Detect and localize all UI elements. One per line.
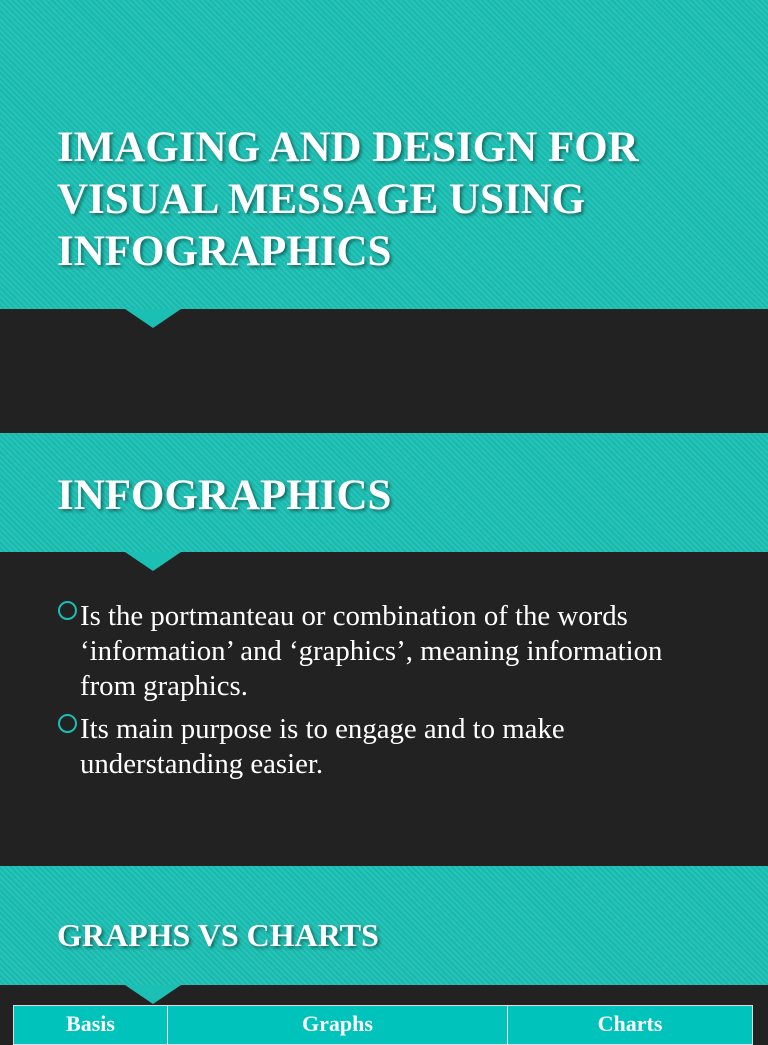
header band: title xyxy=(0,0,768,309)
table header xyxy=(13,1005,753,1045)
heading: infographics: INFOGRAPHICS xyxy=(57,472,391,519)
band: graphs vs charts xyxy=(0,866,768,985)
notch 1 xyxy=(125,309,181,328)
bullet list: Is the portmanteau or combination of the words ‘information’ and ‘graphics’, meaning information from graphics. xyxy=(80,600,662,702)
notch 2 xyxy=(125,552,181,571)
heading: graphs vs charts: GRAPHS VS CHARTS xyxy=(57,917,379,953)
title: IMAGING AND DESIGN FOR VISUAL MESSAGE USING INFOGRAPHICS xyxy=(57,124,639,275)
table header: Graphs xyxy=(302,1011,373,1036)
notch 3 xyxy=(125,985,181,1004)
table header: Charts xyxy=(598,1011,662,1036)
bullet list: Its main purpose is to engage and to make understanding easier. xyxy=(80,713,565,780)
band: infographics heading xyxy=(0,433,768,552)
table header: Basis xyxy=(66,1011,115,1036)
bullet list xyxy=(58,600,662,780)
